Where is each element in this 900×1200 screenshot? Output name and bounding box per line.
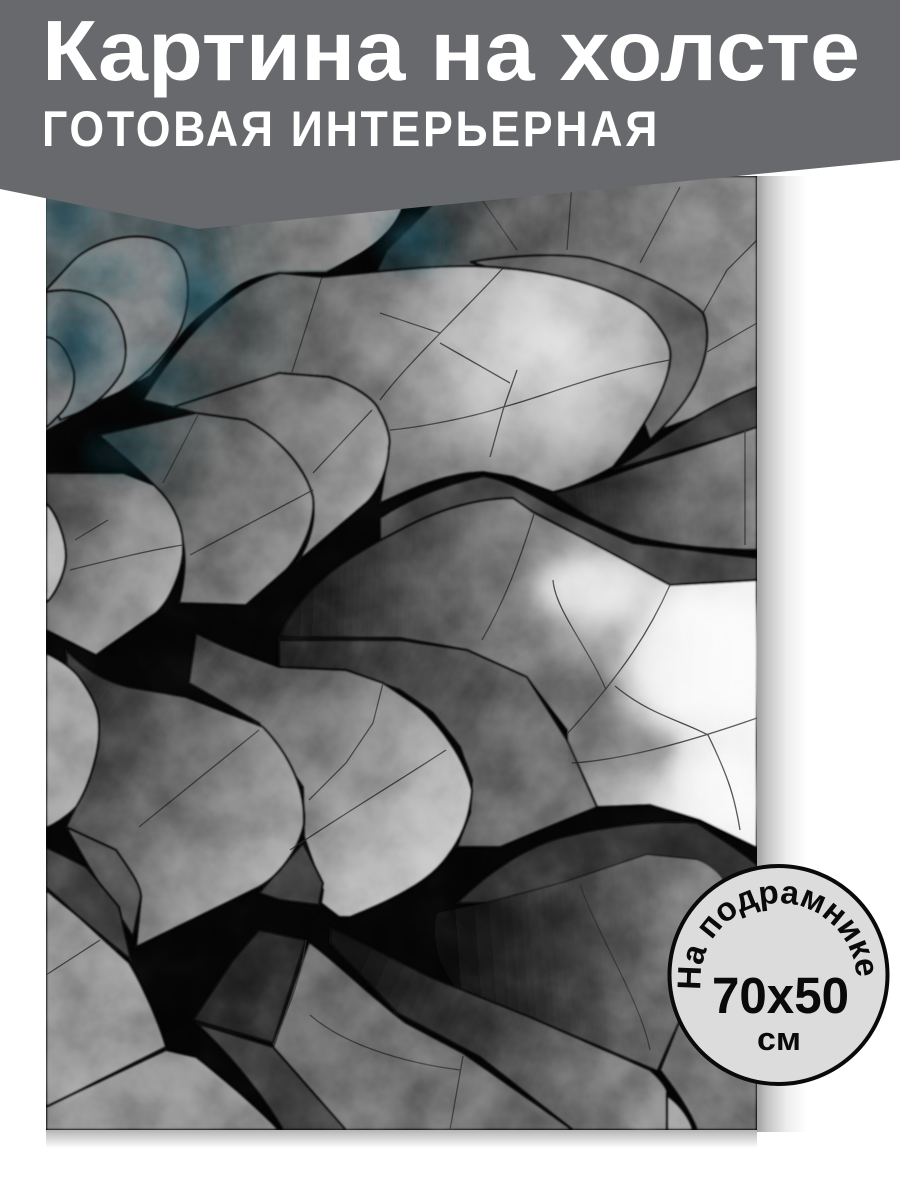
- leaf: top centre: [215, 209, 402, 288]
- canvas artwork: grey leaves: [45, 176, 775, 1130]
- title: Картина на холсте: [42, 4, 860, 99]
- leaf: bottom centre: [273, 942, 573, 1130]
- badge unit: см: [757, 1021, 801, 1057]
- teal tint patches: [45, 195, 447, 469]
- leaf: wedge under lower petal: [259, 843, 323, 905]
- leaf: behind big petal: [470, 255, 707, 440]
- leaf: mid left: [46, 473, 183, 655]
- leaf: mid centre 2: [173, 373, 390, 563]
- leaf: left edge: [46, 653, 99, 828]
- leaf: bottom band: [330, 927, 667, 1130]
- leaf: dark band lower right: [457, 822, 757, 903]
- badge size: 70x50: [712, 967, 849, 1024]
- canvas shadow: [46, 176, 807, 1148]
- leaf: right dark band: [613, 387, 757, 470]
- leaf: right: [553, 427, 757, 550]
- badge: size on stretcher: [668, 864, 890, 1086]
- leaf: centre bright: [279, 498, 757, 848]
- leaf: bottom right big: [435, 855, 723, 1070]
- leaf veins: [46, 183, 757, 1130]
- leaf: lower centre back: [279, 640, 597, 847]
- leaf: upper centre large: [143, 266, 670, 503]
- highlights on the centre leaf: [520, 555, 775, 830]
- leaf: lower centre front: [189, 633, 472, 917]
- header banner: [0, 0, 900, 229]
- badge curved label: На подрамнике: [678, 886, 874, 988]
- leaf: teal upper left base: [46, 198, 346, 430]
- leaf: bottom right: [658, 1024, 757, 1130]
- leaf: upper left 1: [46, 236, 188, 410]
- paper texture: [46, 176, 757, 1130]
- subtitle: ГОТОВАЯ ИНТЕРЬЕРНАЯ: [42, 101, 660, 157]
- leaf: upper left 2: [46, 290, 126, 420]
- leaf: upper left 3: [46, 337, 74, 428]
- leaf: bottom left: [46, 890, 166, 1107]
- leaf: lower left: [66, 650, 304, 947]
- leaf: band under upper petal: [380, 476, 757, 588]
- leaf: top right: [376, 176, 757, 430]
- leaf: mid centre 1: [99, 413, 313, 605]
- leaf: dark bands lower left: [66, 827, 141, 937]
